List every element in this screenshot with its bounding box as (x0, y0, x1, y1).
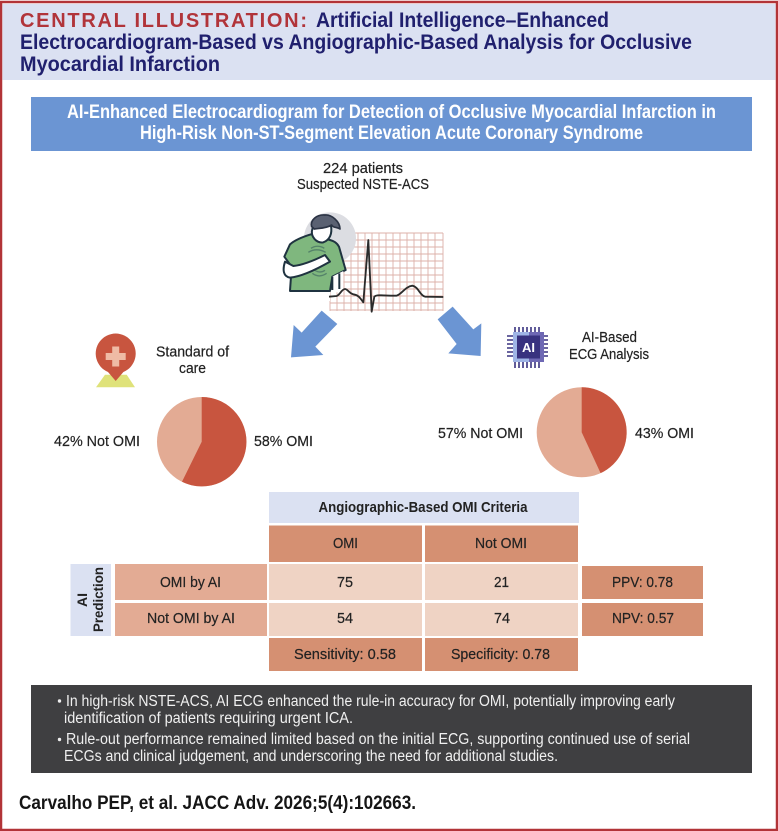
label: standard of care (156, 344, 230, 377)
NPV (582, 603, 703, 636)
label: standard of care: Standard of (156, 344, 230, 360)
confusion matrix table (70, 492, 703, 671)
label: AI-based ECG analysis: AI-Based (582, 329, 637, 346)
column head: not OMI: Not OMI (475, 535, 527, 552)
icon: AI chip: AI (522, 340, 535, 355)
row axis: AI prediction: AI (74, 593, 90, 607)
specificity (425, 638, 578, 671)
title band: Myocardial Infarction (20, 53, 220, 76)
table header: Angiographic-Based OMI Criteria (318, 499, 528, 516)
ECG trace (329, 240, 443, 312)
column head: OMI (269, 526, 422, 562)
title band (2, 4, 776, 80)
label: 58% OMI: 58% OMI (254, 433, 313, 450)
PPV (582, 566, 703, 599)
label: AI-based ECG analysis: ECG Analysis (569, 346, 649, 363)
row 1: 21 (494, 574, 509, 591)
subtitle banner: High-Risk Non-ST-Segment Elevation Acute Coronary Syndrome (140, 123, 643, 144)
row axis: AI prediction (70, 564, 111, 636)
key takeaways box (31, 685, 752, 773)
row 1: 75 (337, 574, 353, 591)
title band: Artificial Intelligence–Enhanced (316, 9, 609, 32)
NPV: NPV: 0.57 (612, 610, 674, 627)
icon: AI chip (507, 327, 548, 368)
specificity: Specificity: 0.78 (451, 646, 550, 663)
label: standard of care: care (179, 360, 206, 377)
subtitle banner (31, 97, 752, 151)
arrow: to AI-based analysis (438, 307, 481, 356)
patient count (297, 160, 429, 193)
row 1 (115, 564, 578, 600)
citation: Carvalho PEP, et al. JACC Adv. 2026;5(4):102663. (19, 793, 416, 814)
row 1: OMI by AI (160, 574, 221, 591)
row 2: Not OMI by AI (147, 610, 235, 627)
key takeaways box: ECGs and clinical judgement, and underscoring the need for additional studies. (64, 748, 558, 765)
icon: hospital pin (96, 334, 136, 387)
column head: OMI: OMI (333, 535, 358, 552)
patient count: Suspected NSTE-ACS (297, 176, 429, 193)
title band: Electrocardiogram-Based vs Angiographic-Based Analysis for Occlusive (20, 31, 692, 54)
label: 43% OMI: 43% OMI (635, 425, 694, 442)
title band: CENTRAL ILLUSTRATION: (20, 10, 307, 32)
row axis: AI prediction: Prediction (90, 567, 106, 632)
icon: patient holding chest (284, 212, 356, 301)
sensitivity (269, 638, 422, 671)
label: 42% not OMI: 42% Not OMI (54, 433, 140, 450)
ECG grid (330, 233, 443, 311)
label: 57% not OMI: 57% Not OMI (438, 425, 523, 442)
label: AI-based ECG analysis (569, 329, 649, 363)
sensitivity: Sensitivity: 0.58 (294, 646, 396, 663)
key takeaways box: identification of patients requiring urgent ICA. (64, 710, 353, 727)
row 2: 54 (337, 610, 353, 627)
pie chart: standard of care (157, 397, 246, 486)
column head: not OMI (425, 526, 578, 562)
pie chart: AI-based (537, 387, 627, 477)
patient count: 224 patients (323, 160, 403, 177)
key takeaways box: In high-risk NSTE-ACS, AI ECG enhanced the rule-in accuracy for OMI, potentially improving early (66, 693, 675, 710)
table header (269, 492, 579, 523)
row 2 (115, 603, 578, 636)
key takeaways box: Rule-out performance remained limited based on the initial ECG, supporting continued use of serial (66, 731, 690, 748)
arrow: to standard of care (291, 311, 337, 357)
PPV: PPV: 0.78 (612, 574, 673, 591)
row 2: 74 (494, 610, 510, 627)
